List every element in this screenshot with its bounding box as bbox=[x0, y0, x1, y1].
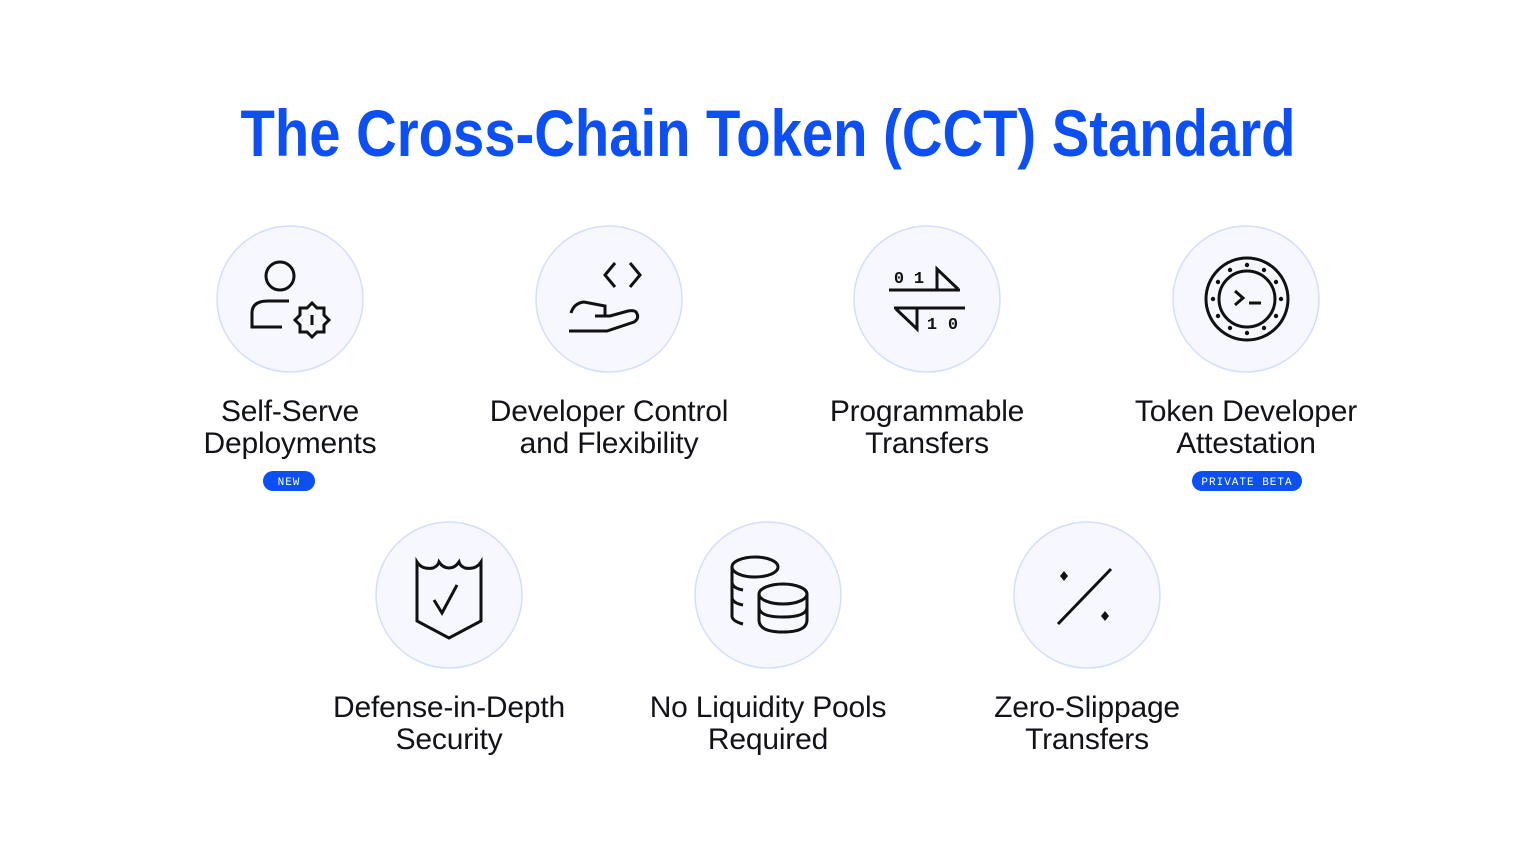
feature: Developer Control and Flexibility: and Flexibility bbox=[520, 427, 699, 460]
icon: terminal seal bbox=[1206, 258, 1288, 340]
icon: percent bbox=[1058, 569, 1111, 624]
feature: Programmable Transfers: 1 bbox=[914, 270, 924, 289]
feature: Zero-Slippage Transfers bbox=[994, 522, 1180, 756]
feature: Zero-Slippage Transfers: Zero-Slippage bbox=[994, 691, 1180, 724]
badge: PRIVATE BETA: PRIVATE BETA bbox=[1201, 477, 1293, 489]
feature: No Liquidity Pools Required bbox=[650, 522, 886, 756]
feature: Programmable Transfers bbox=[830, 226, 1024, 460]
feature: Programmable Transfers: 1 bbox=[927, 316, 937, 335]
feature: Zero-Slippage Transfers: Transfers bbox=[1025, 723, 1149, 756]
feature: Defense-in-Depth Security: Security bbox=[396, 723, 503, 756]
feature: Self-Serve Deployments: Self-Serve bbox=[221, 395, 359, 428]
icon: hand with code bbox=[569, 263, 640, 331]
feature: Developer Control and Flexibility bbox=[490, 226, 728, 460]
icon: user with gear bbox=[252, 262, 329, 337]
feature: Defense-in-Depth Security: Defense-in-Depth bbox=[333, 691, 565, 724]
feature: Defense-in-Depth Security bbox=[333, 522, 565, 756]
icon: coin stacks bbox=[732, 557, 807, 632]
badge: NEW: NEW bbox=[278, 477, 300, 489]
icon: transfer arrows with binary bbox=[889, 269, 965, 329]
badge: NEW bbox=[263, 471, 315, 491]
feature: Self-Serve Deployments: Deployments bbox=[204, 427, 376, 460]
feature: No Liquidity Pools Required: No Liquidity Pools bbox=[650, 691, 886, 724]
feature: No Liquidity Pools Required: Required bbox=[708, 723, 828, 756]
badge: PRIVATE BETA bbox=[1192, 471, 1302, 491]
feature: Programmable Transfers: 0 bbox=[948, 316, 958, 335]
feature: Programmable Transfers: Programmable bbox=[830, 395, 1024, 428]
feature: Programmable Transfers: 0 bbox=[894, 270, 904, 289]
icon: shield with check bbox=[417, 562, 481, 638]
feature: Programmable Transfers: Transfers bbox=[865, 427, 989, 460]
feature: Developer Control and Flexibility: Developer Control bbox=[490, 395, 728, 428]
feature: Token Developer Attestation bbox=[1135, 226, 1357, 491]
feature: Token Developer Attestation: Token Developer bbox=[1135, 395, 1357, 428]
feature: Token Developer Attestation: Attestation bbox=[1176, 427, 1316, 460]
title: The Cross-Chain Token (CCT) Standard bbox=[240, 96, 1296, 170]
feature: Self-Serve Deployments bbox=[204, 226, 376, 491]
